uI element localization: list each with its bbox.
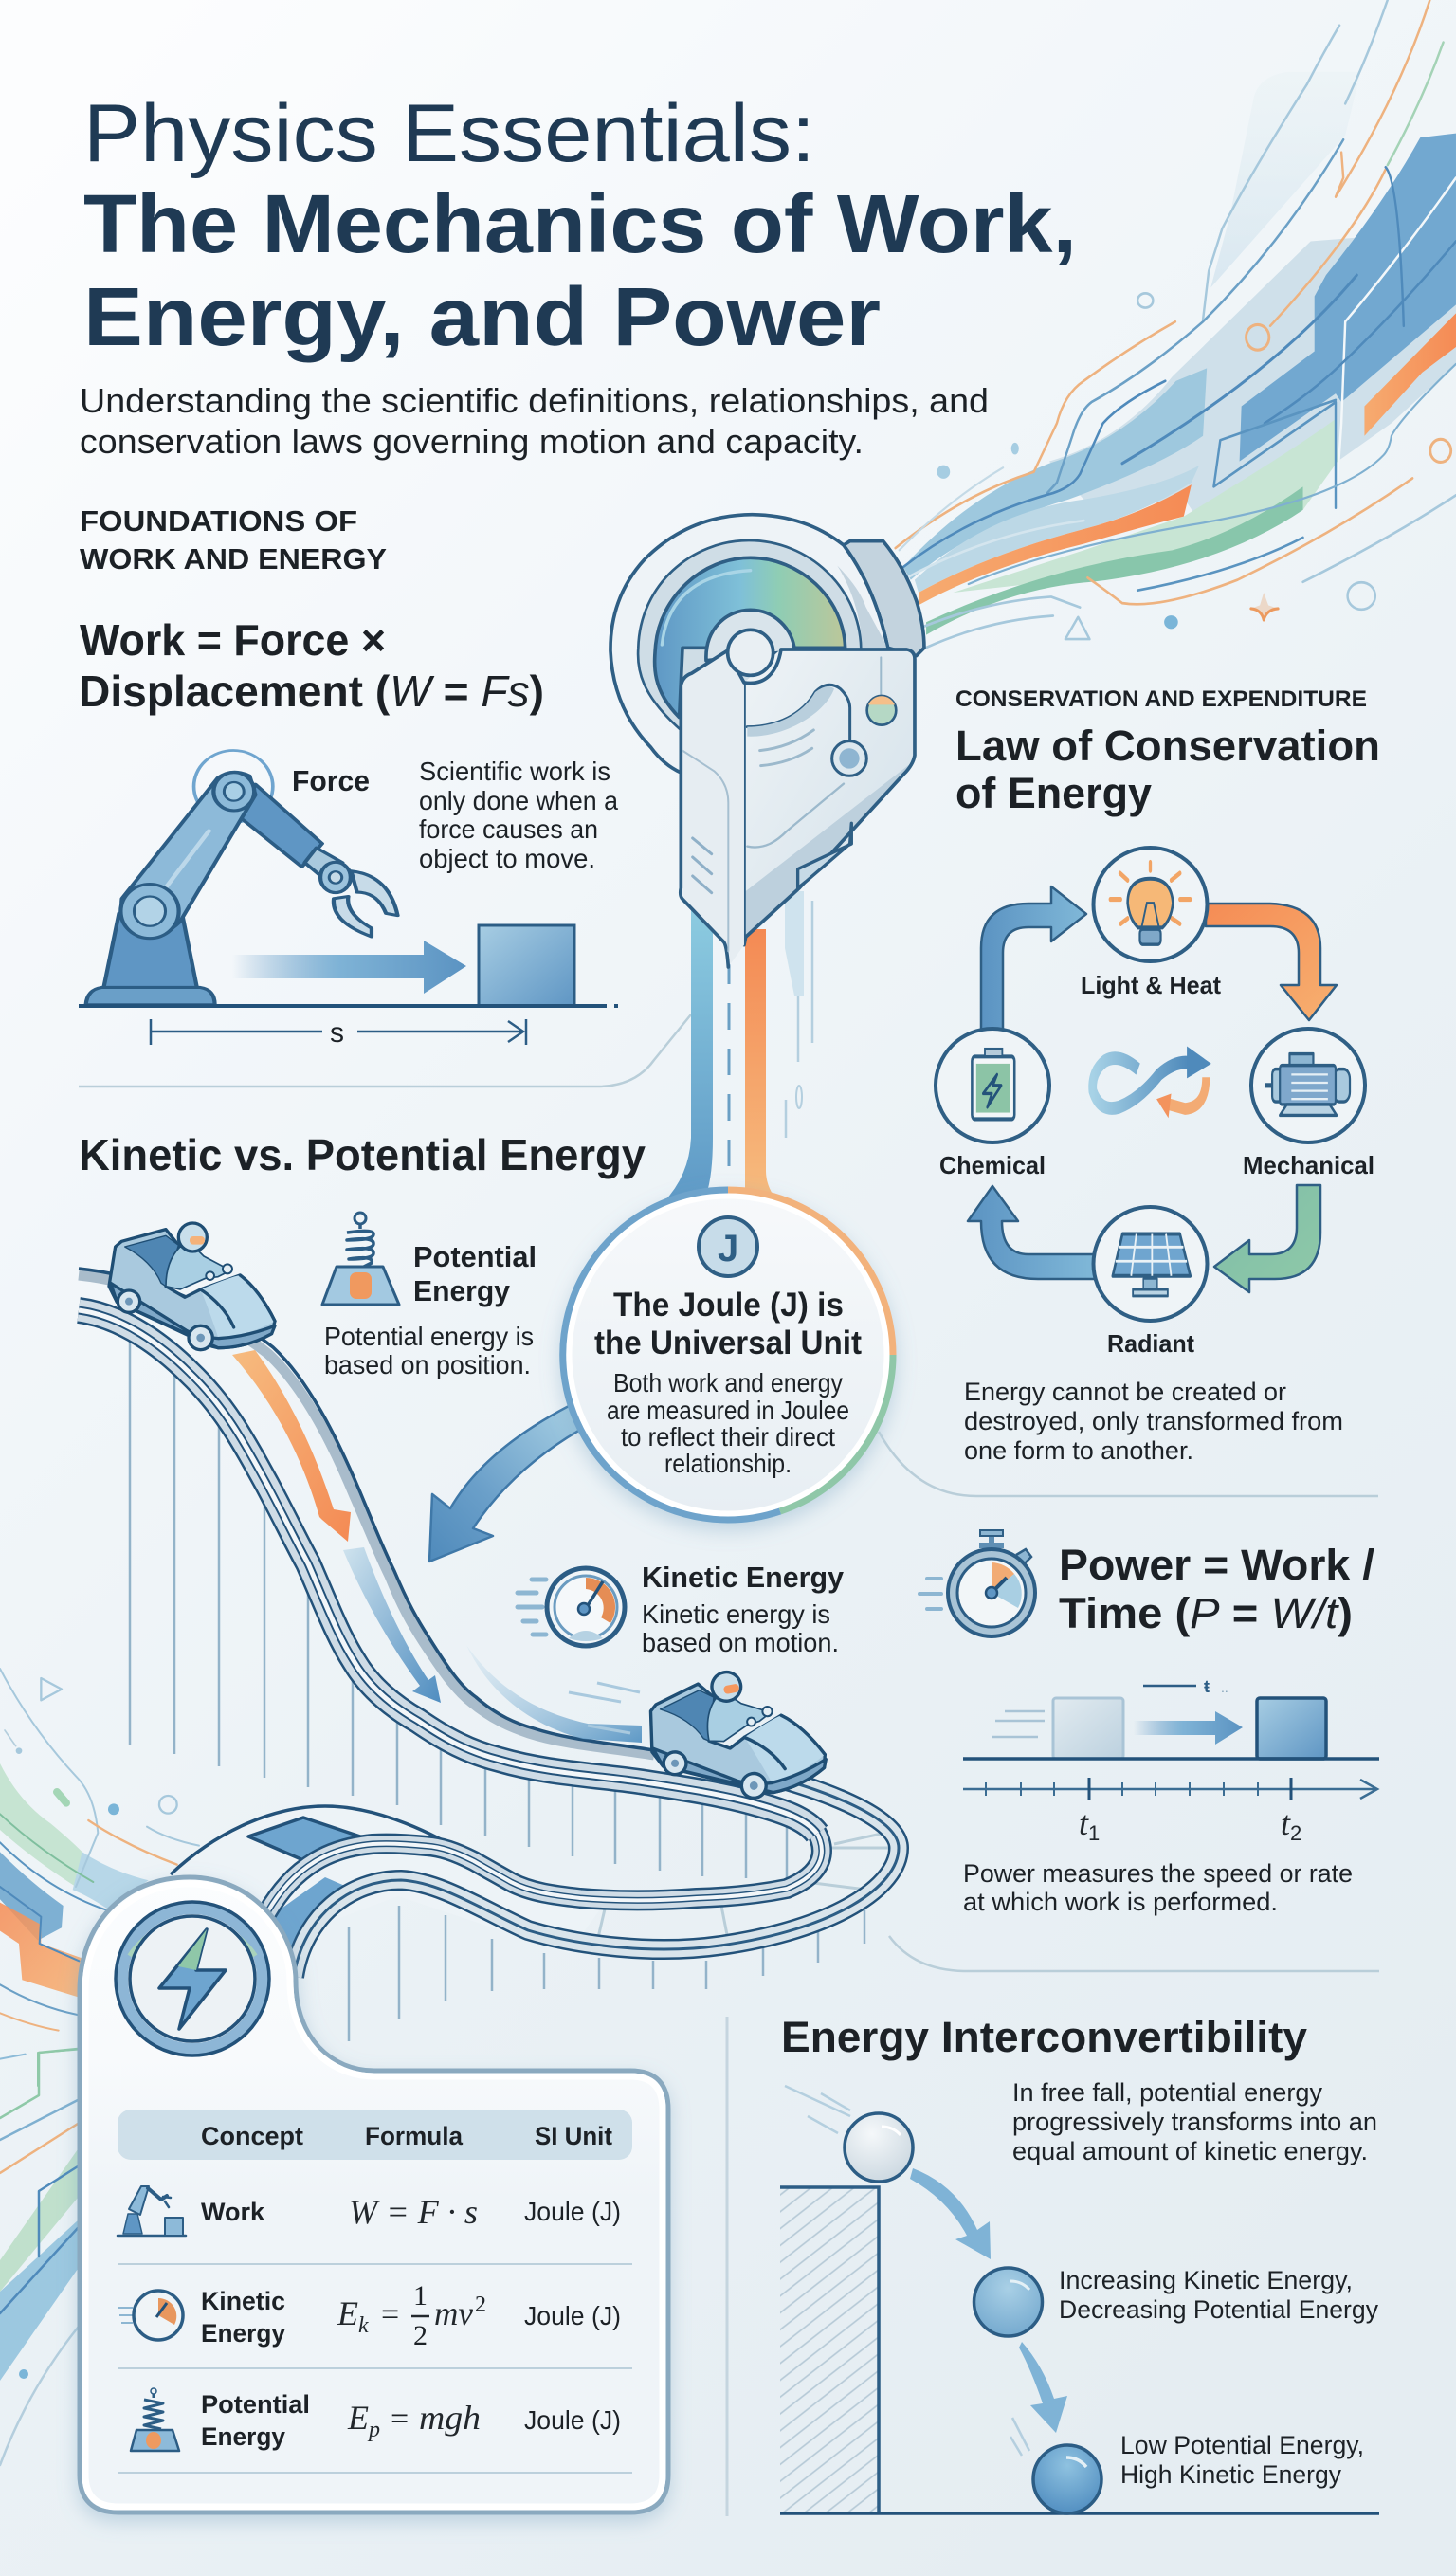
formula: kinetic energy: k: [358, 2313, 369, 2338]
hump: [171, 1806, 607, 1972]
text: increasing kinetic: [1059, 2266, 1378, 2324]
arrow: mechanical to radiant: [1214, 1185, 1320, 1292]
formula: potential energy: [347, 2399, 481, 2442]
main drop lower rail: [79, 1310, 817, 1834]
heading: work formula: [79, 615, 544, 716]
icon: mini gauge: [118, 2291, 183, 2340]
housing right panel: [744, 649, 915, 937]
section heading: foundations: FOUNDATIONS OF: [80, 504, 357, 538]
formula: potential energy: =: [391, 2402, 409, 2437]
heading: law of conservation: Law of Conservation: [956, 722, 1380, 770]
node: radiant: [1094, 1207, 1208, 1321]
curved arrow: joule to coaster: [429, 1406, 580, 1562]
text: free fall: progressively transforms into an: [1012, 2108, 1377, 2136]
text: free fall: [1012, 2078, 1377, 2165]
robot arm: [86, 751, 397, 1005]
text: conservation law: Energy cannot be created or: [964, 1378, 1286, 1406]
heading: power formula: Power = Work /: [1059, 1541, 1375, 1589]
label: t1: t: [1079, 1804, 1088, 1842]
formula: kinetic energy: 2: [413, 2320, 428, 2351]
energy ribbons lower left: [0, 1669, 199, 2465]
formula: kinetic energy: =: [381, 2297, 399, 2332]
text: low potential: Low Potential Energy,: [1120, 2431, 1364, 2459]
displacement marker: [151, 1017, 526, 1049]
row: work: Work: [201, 2198, 265, 2226]
label: t2: t: [1281, 1804, 1290, 1842]
row: kinetic energy: [118, 2280, 621, 2351]
row: kinetic energy: Energy: [201, 2319, 285, 2348]
icon: stopwatch: [919, 1530, 1035, 1636]
icon: kinetic gauge: [518, 1568, 625, 1646]
arrow: light to mechanical: [1206, 904, 1337, 1020]
heading: work formula: Displacement (W = Fs): [79, 667, 544, 716]
J badge: [699, 1217, 757, 1276]
heading: power formula: Time (P = W/t): [1059, 1589, 1353, 1637]
formula: potential energy: E: [347, 2399, 369, 2437]
vertical power ribbons: [664, 891, 812, 1202]
title: Energy, and Power: [83, 271, 881, 363]
text: free fall: equal amount of kinetic energy.: [1012, 2137, 1368, 2165]
arrow: radiant to chemical: [968, 1186, 1095, 1279]
outer loop track: [294, 1773, 899, 1977]
axle: [728, 630, 774, 675]
subtitle: Understanding the scientific definitions, relationships, and: [80, 381, 989, 420]
label: mechanical: Mechanical: [1243, 1151, 1374, 1179]
joule callout: [429, 1190, 893, 1562]
row: potential energy: [131, 2388, 621, 2451]
ball: middle: [974, 2268, 1043, 2336]
icon: infinity transformation: [1093, 1047, 1211, 1118]
small time mark: [1143, 1677, 1228, 1696]
label: potential energy: Potential: [413, 1240, 537, 1273]
arrow: fall two: [1019, 2342, 1067, 2433]
text: free fall: In free fall, potential energy: [1012, 2078, 1322, 2107]
energy transformation cycle: [936, 848, 1374, 1358]
arrow: displacement over time: [1134, 1711, 1243, 1745]
label: potential energy: based on position.: [324, 1350, 531, 1379]
text: work explanation: [419, 757, 618, 873]
heading: work formula: Work = Force ×: [80, 615, 386, 665]
label: kinetic energy: Kinetic energy is: [642, 1599, 830, 1629]
icon: lightning badge: [116, 1902, 269, 2055]
car top with rider: [109, 1223, 275, 1350]
lower loop floor: [502, 1830, 899, 1949]
joule body text: relationship.: [664, 1449, 792, 1478]
ball: top: [845, 2113, 913, 2182]
table header: Concept: [201, 2122, 303, 2150]
row: work: [118, 2186, 621, 2236]
label: t2: 2: [1290, 1821, 1301, 1845]
label: potential energy: [324, 1240, 537, 1379]
row: kinetic energy: Kinetic: [201, 2287, 285, 2315]
title: [83, 88, 1077, 363]
disc: [655, 557, 846, 718]
row: work: W = F · s: [349, 2193, 478, 2231]
icon: mini spring: [131, 2388, 179, 2451]
car bottom with rider: [640, 1656, 830, 1816]
text: work explanation: object to move.: [419, 844, 595, 873]
icon: mini robot: [118, 2186, 186, 2236]
joule body text: are measured in Joulee: [607, 1396, 849, 1425]
heading: law of conservation: [956, 722, 1380, 817]
small time mark: ..: [1221, 1680, 1228, 1695]
table header: Formula: [365, 2122, 464, 2150]
row: potential energy: Energy: [201, 2422, 285, 2451]
energy ribbons top right: [896, 0, 1456, 648]
arrow: chemical to light: [981, 886, 1086, 1030]
formula: kinetic energy: [337, 2280, 486, 2351]
formula: potential energy: mgh: [419, 2399, 481, 2437]
formula: kinetic energy: 1: [413, 2280, 428, 2311]
bracket: [844, 541, 924, 656]
outer wheel: [610, 515, 888, 773]
formula: kinetic energy: E: [337, 2294, 358, 2332]
node: mechanical: [1251, 1029, 1365, 1142]
motion streaks: [992, 1711, 1045, 1737]
section heading: foundations: WORK AND ENERGY: [80, 542, 387, 575]
small time mark: ŧ: [1204, 1677, 1210, 1696]
joule heading: the Universal Unit: [594, 1325, 862, 1361]
illustration: robot arm pushing box: [79, 751, 618, 1049]
speed trail: [466, 1645, 642, 1743]
title: Physics Essentials:: [83, 88, 815, 179]
text: work explanation: force causes an: [419, 814, 598, 844]
motion lines: [785, 2086, 850, 2133]
table header: [118, 2110, 632, 2160]
ground: [780, 2512, 1379, 2515]
row: work: Joule (J): [524, 2197, 621, 2226]
text: conservation law: one form to another.: [964, 1436, 1193, 1465]
text: power explanation: at which work is performed.: [963, 1888, 1278, 1916]
joule body text: [607, 1368, 849, 1478]
joule heading: The Joule (J) is: [613, 1287, 844, 1324]
icon: potential energy spring: [322, 1213, 399, 1305]
J badge: J: [718, 1228, 738, 1270]
joule heading: [594, 1287, 862, 1361]
label: radiant: Radiant: [1107, 1329, 1194, 1358]
text: increasing kinetic: Decreasing Potential Energy: [1059, 2295, 1378, 2324]
section heading: foundations: [80, 504, 387, 575]
box: [479, 925, 574, 1006]
box at t2: [1257, 1698, 1326, 1759]
roller coaster: [79, 1269, 899, 2041]
label: light and heat: Light & Heat: [1081, 971, 1221, 999]
text: low potential: High Kinetic Energy: [1120, 2460, 1341, 2489]
summary card: [80, 1877, 668, 2512]
text: low potential: [1120, 2431, 1364, 2489]
force label: Force: [292, 764, 370, 797]
upper rail: [79, 1275, 654, 1755]
subtitle: conservation laws governing motion and capacity.: [80, 422, 864, 461]
heading: law of conservation: of Energy: [956, 769, 1152, 817]
label: kinetic energy: Kinetic Energy: [642, 1561, 845, 1594]
label: chemical: Chemical: [939, 1151, 1046, 1179]
hub: [706, 610, 794, 661]
joule circle: [563, 1190, 893, 1520]
label: potential energy: Energy: [413, 1274, 511, 1307]
row: potential energy: Potential: [201, 2390, 310, 2419]
arrow: potential to kinetic orange: [232, 1350, 351, 1542]
text: power explanation: Power measures the speed or rate: [963, 1859, 1353, 1888]
arrow: speed blue: [343, 1547, 441, 1703]
illustration: power timeline: [963, 1677, 1379, 1845]
joule body text: Both work and energy: [613, 1368, 843, 1398]
text: conservation law: [964, 1378, 1343, 1465]
heading: energy interconvertibility: Energy Interconvertibility: [781, 2013, 1307, 2061]
coaster supports: [130, 1342, 864, 2041]
heading: power formula: [1059, 1541, 1375, 1637]
text: increasing kinetic: Increasing Kinetic Energy,: [1059, 2266, 1353, 2294]
arrow: fall one: [910, 2168, 991, 2259]
row: potential energy: Joule (J): [524, 2405, 621, 2435]
label: kinetic energy: [642, 1561, 845, 1657]
arrow: push direction: [232, 941, 466, 994]
label: t1: 1: [1088, 1821, 1100, 1845]
subtitle: [80, 381, 989, 461]
platform: [780, 2187, 879, 2513]
text: work explanation: Scientific work is: [419, 757, 610, 786]
housing left panel: [681, 651, 744, 967]
ring track continuing from the drop: [267, 1830, 822, 1912]
text: power explanation: [963, 1859, 1353, 1916]
label: potential energy: Potential energy is: [324, 1322, 534, 1351]
ground line: [79, 1004, 618, 1008]
node: chemical: [936, 1029, 1049, 1142]
illustration: falling ball: [780, 2086, 1379, 2513]
formula: kinetic energy: 2: [475, 2293, 486, 2317]
card body: [80, 1877, 668, 2512]
label: kinetic energy: based on motion.: [642, 1628, 839, 1657]
table header: SI Unit: [535, 2122, 612, 2150]
formula: kinetic energy: mv: [434, 2294, 473, 2332]
section label: conservation: CONSERVATION AND EXPENDITURE: [956, 686, 1367, 712]
row: kinetic energy: Joule (J): [524, 2301, 621, 2330]
pulley mechanism: [610, 515, 924, 967]
ball: bottom: [1033, 2445, 1101, 2513]
formula: potential energy: p: [367, 2418, 380, 2442]
box at t1: [1053, 1698, 1123, 1759]
displacement marker: s: [330, 1017, 344, 1049]
node: light and heat: [1094, 848, 1208, 961]
joule body text: to reflect their direct: [621, 1422, 835, 1452]
title: The Mechanics of Work,: [83, 178, 1077, 270]
heading: kinetic vs potential: Kinetic vs. Potential Energy: [79, 1130, 646, 1179]
text: work explanation: only done when a: [419, 786, 618, 815]
timeline axis: [963, 1778, 1377, 1800]
text: conservation law: destroyed, only transformed from: [964, 1407, 1343, 1435]
